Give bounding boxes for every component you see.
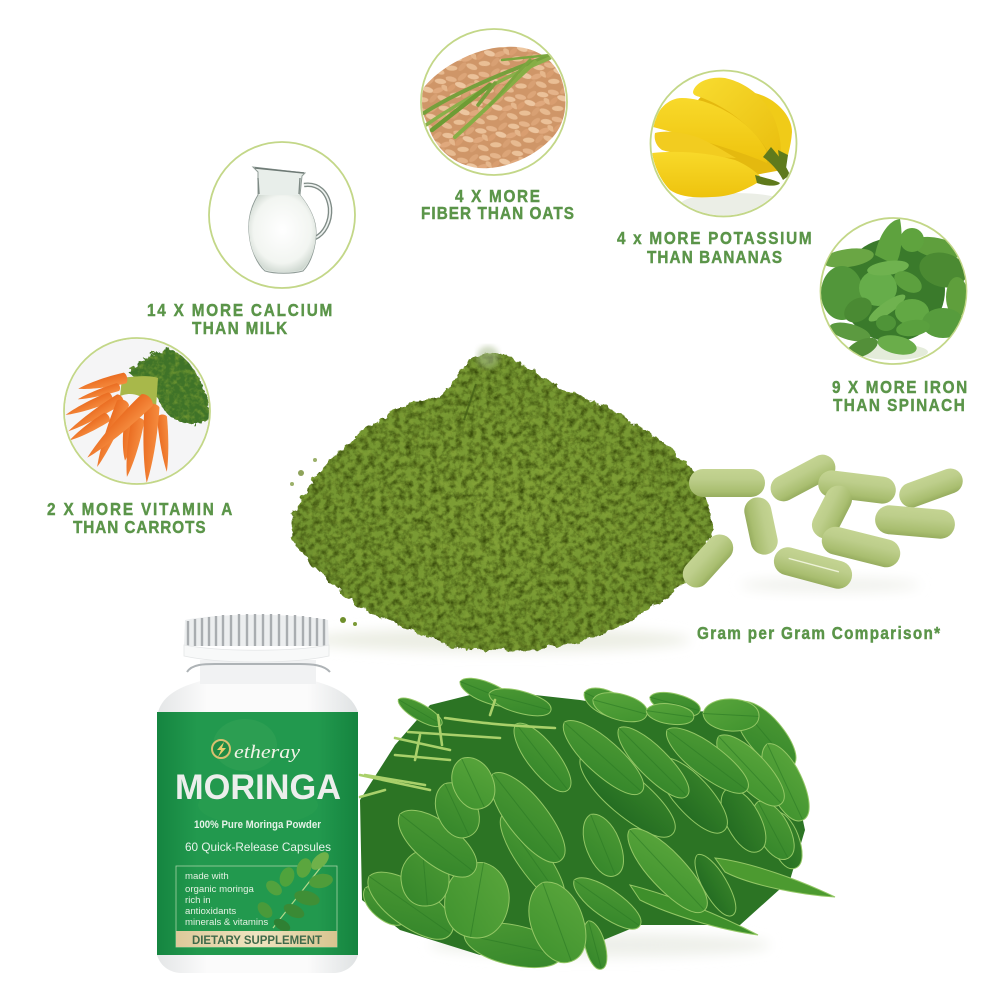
icon: carrots: [63, 338, 211, 485]
callout: bananas: [617, 70, 812, 267]
label: fiber: 4 X MORE: [455, 186, 540, 206]
moringa leaves: [356, 672, 835, 975]
capsule 8: [819, 524, 903, 570]
brand logo: etheray: [234, 742, 301, 763]
label: fiber: FIBER THAN OATS: [421, 203, 574, 223]
moringa sprig: [255, 849, 334, 934]
label: potassium: THAN BANANAS: [647, 247, 782, 267]
benefits box: antioxidants: [185, 906, 236, 917]
label: vitamin A: 2 X MORE VITAMIN A: [47, 499, 232, 519]
icon: milk jug: [209, 142, 355, 288]
label: iron: [832, 377, 967, 415]
capsule 1: [689, 469, 765, 497]
icon: spinach: [820, 218, 971, 364]
label: calcium: 14 X MORE CALCIUM: [147, 300, 332, 320]
capsule 2: [766, 450, 840, 506]
capsule 9: [771, 544, 855, 592]
capsule count: 60 Quick-Release Capsules: [185, 840, 331, 854]
comparison note: Gram per Gram Comparison*: [697, 623, 941, 643]
label: vitamin A: THAN CARROTS: [73, 517, 206, 537]
label: potassium: [617, 228, 812, 267]
benefits box: made with: [185, 871, 229, 882]
icon: bananas: [650, 70, 796, 217]
benefits box: [176, 866, 337, 947]
capsules: [677, 450, 966, 593]
brand logo: [212, 740, 301, 763]
capsule 10: [677, 529, 739, 593]
label: fiber: [421, 186, 574, 223]
callout: oats: [421, 29, 574, 223]
label: vitamin A: [47, 499, 232, 537]
capsule 4: [896, 465, 966, 511]
capsule 7: [874, 504, 956, 540]
banner: DIETARY SUPPLEMENT: [192, 933, 323, 947]
capsule 6: [807, 481, 857, 543]
label: iron: 9 X MORE IRON: [832, 377, 967, 397]
benefits box: rich in: [185, 895, 211, 906]
subtitle: 100% Pure Moringa Powder: [194, 819, 322, 831]
capsule 3: [817, 469, 897, 505]
callout: milk: [147, 142, 355, 338]
benefits box: minerals & vitamins: [185, 917, 268, 928]
label: calcium: [147, 300, 332, 338]
powder pile: [290, 346, 713, 652]
bottle body: [157, 680, 358, 973]
bottle neck: [187, 660, 330, 684]
label: potassium: 4 x MORE POTASSIUM: [617, 228, 812, 248]
label: calcium: THAN MILK: [192, 318, 287, 338]
supplement bottle: [157, 614, 358, 973]
benefits box: organic moringa: [185, 884, 254, 895]
product name: MORINGA: [175, 768, 341, 807]
bottle label: [157, 712, 358, 955]
bottle cap: [184, 614, 329, 662]
capsule 5: [742, 495, 780, 557]
callout: spinach: [820, 218, 971, 415]
icon: oats: [421, 29, 567, 175]
label: iron: THAN SPINACH: [833, 395, 965, 415]
callout: carrots: [47, 338, 232, 537]
